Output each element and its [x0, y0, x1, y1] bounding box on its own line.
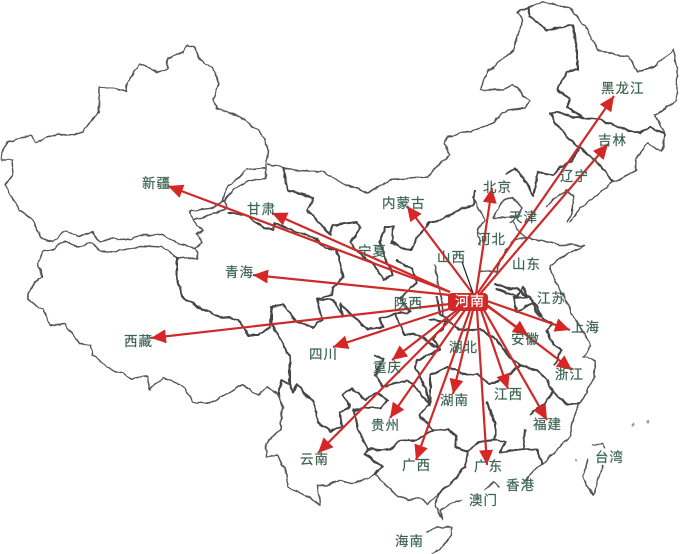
arrow to Tibet: [151, 304, 450, 338]
label Tibet: 西藏: [124, 334, 153, 349]
Taiwan: [593, 444, 605, 448]
arrow to Qinghai: [253, 275, 450, 295]
arrow to Heilongjiang: [477, 96, 614, 294]
arrow to Yunnan: [318, 310, 460, 453]
label Sichuan: 四川: [309, 347, 338, 362]
arrow to Gansu: [272, 213, 450, 292]
arrow to Guizhou: [390, 310, 465, 418]
arrow to Inner Mongolia: [407, 206, 473, 294]
Hainan: [427, 527, 452, 554]
label Fujian: 福建: [533, 417, 562, 432]
label Xinjiang: 新疆: [142, 176, 171, 191]
Shaanxi and Sichuan borders: [317, 260, 417, 329]
label Gansu: 甘肃: [247, 202, 276, 217]
label Shandong: 山东: [512, 257, 541, 272]
label Qinghai: 青海: [225, 265, 254, 280]
label Taiwan: 台湾: [595, 449, 624, 465]
islands: [574, 420, 650, 462]
label Jiangxi: 江西: [494, 387, 523, 402]
Gansu corridor line: [193, 168, 266, 221]
label Inner Mongolia: 内蒙古: [382, 196, 426, 211]
label Shanxi: 山西: [437, 250, 466, 265]
central and southern provincial borders: [395, 314, 447, 350]
label Shaanxi: 陕西: [394, 296, 423, 311]
label Jilin: 吉林: [598, 133, 627, 148]
label Hainan: 海南: [395, 534, 424, 549]
label Guangxi: 广西: [402, 458, 431, 473]
label Yunnan: 云南: [300, 452, 329, 467]
label Macau: 澳门: [469, 493, 498, 508]
arrow to Anhui: [487, 306, 528, 335]
label Tianjin: 天津: [509, 210, 538, 225]
arrow to Hunan: [453, 310, 473, 394]
label Hong Kong: 香港: [506, 478, 535, 493]
arrow to Jiangxi: [481, 310, 508, 389]
arrows from Henan: [151, 96, 614, 465]
label Anhui: 安徽: [511, 332, 540, 347]
arrow to Chongqing: [392, 310, 457, 360]
northern and northeastern border: [268, 2, 677, 223]
arrow to Shanghai: [487, 301, 570, 330]
eastern provincial borders: [497, 287, 562, 364]
arrow to Guangxi: [416, 310, 470, 460]
arrow to Zhejiang: [487, 305, 572, 370]
Xinjiang outline: [2, 45, 268, 248]
Shanxi connector line: [462, 262, 473, 293]
Tibet and Yunnan border: [27, 241, 462, 520]
arrow to Sichuan: [333, 308, 452, 347]
arrow to Fujian: [484, 310, 547, 420]
label Zhejiang: 浙江: [555, 367, 584, 382]
label Beijing: 北京: [483, 180, 512, 195]
arrow to Beijing: [476, 188, 492, 294]
arrow to Xinjiang: [168, 186, 450, 292]
label Heilongjiang: 黑龙江: [601, 81, 644, 96]
Inner Mongolia southern border: [283, 168, 475, 280]
label Chongqing: 重庆: [373, 360, 402, 375]
label Guizhou: 贵州: [371, 418, 400, 433]
label Jiangsu: 江苏: [537, 291, 566, 306]
label Liaoning: 辽宁: [560, 168, 589, 184]
Gansu and Qinghai provincial borders: [177, 212, 343, 335]
northeast provincial borders: [507, 112, 665, 197]
label Guangdong: 广东: [474, 459, 503, 474]
arrow to Guangdong: [477, 310, 487, 465]
label Ningxia: 宁夏: [358, 243, 387, 259]
east and south coast: [513, 223, 595, 482]
label Hunan: 湖南: [440, 393, 469, 408]
province labels: [124, 81, 644, 549]
label Hebei: 河北: [477, 232, 506, 247]
Henan hub badge: 河南: [455, 293, 485, 309]
label Shanghai: 上海: [571, 320, 600, 335]
arrow to Jilin: [480, 144, 608, 294]
label Hubei: 湖北: [449, 340, 478, 355]
Henan hub badge: [448, 293, 488, 311]
Bohai and Tianjin lines: [547, 190, 573, 223]
